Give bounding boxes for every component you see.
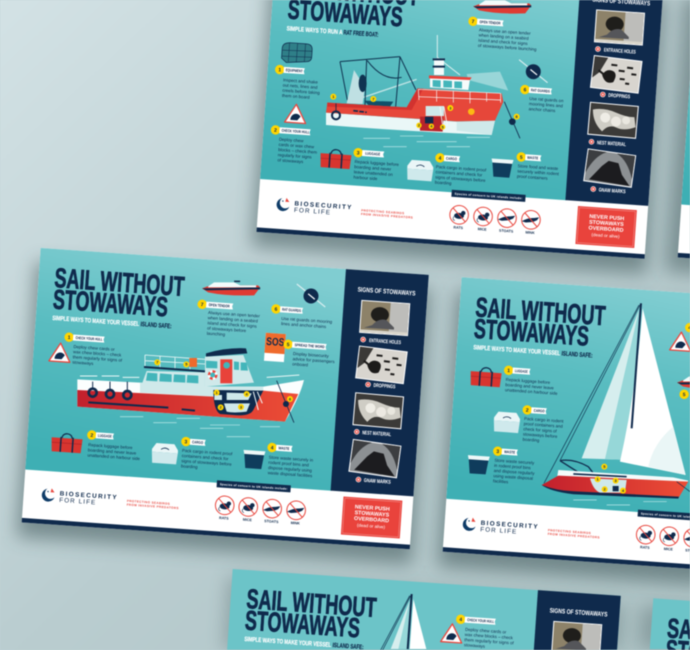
- step: check your hull: stowaways: [72, 360, 94, 366]
- step: luggage: boarding and never: [354, 164, 392, 172]
- logo and tagline: FROM INVASIVE PREDATORS: [127, 503, 179, 510]
- step: luggage: boarding and never leave: [88, 447, 137, 456]
- icon: cargo box: [406, 160, 434, 181]
- step: equipment: EQUIPMENT: [286, 68, 303, 73]
- icon: fishing boat: 7: [372, 96, 375, 101]
- step: waste: and dispose regularly: [494, 468, 535, 476]
- step: equipment: creels before taking: [282, 88, 321, 95]
- icon: cargo box: [151, 443, 178, 464]
- icon: motor vessel: 6: [289, 396, 292, 401]
- poster sheet with text: [256, 0, 664, 259]
- logo and tagline: FOR LIFE: [59, 497, 95, 506]
- step: open tender: of stowaways before launching: [478, 43, 537, 52]
- step: cargo: Pack cargo in rodent: [524, 416, 564, 424]
- step: luggage: LUGGAGE: [515, 369, 528, 374]
- step: open tender: when landing on a seabird: [478, 32, 529, 41]
- step: cargo: 4: [438, 156, 442, 162]
- step: check your hull: them regularly for signs of: [73, 354, 123, 363]
- step: luggage: [352, 148, 400, 183]
- step: equipment: Inspect and shake: [283, 77, 319, 85]
- step: check your hull marker: [685, 323, 690, 333]
- step: luggage: Repack luggage before: [354, 159, 400, 167]
- icon: warning triangle: [49, 342, 71, 362]
- step: waste: 3: [496, 449, 500, 455]
- step: check your hull: [63, 332, 125, 368]
- step: waste: dispose regularly using: [268, 465, 313, 473]
- icon: fishing boat: 4: [430, 124, 433, 129]
- icon: motor vessel: 2: [220, 405, 223, 410]
- logo and tagline: PROTECTING SEABIRDS: [548, 528, 591, 535]
- step: open tender marker: [679, 389, 689, 399]
- step: luggage: 2: [90, 433, 94, 439]
- step: cargo: containers and check for: [181, 453, 229, 461]
- step: cargo: [433, 153, 488, 188]
- species of concern: RATS: [453, 225, 464, 230]
- step: rat guards: Use rat guards on mooring: [281, 316, 333, 324]
- step: waste: 5: [520, 155, 523, 161]
- step: luggage: boarding and never leave: [505, 382, 555, 390]
- step: check your hull: stowaways: [464, 642, 485, 649]
- species of concern: MICE: [243, 518, 253, 522]
- step: check your hull: Deploy chew cards or: [465, 627, 507, 635]
- step: waste: Store waste securely in: [269, 455, 314, 463]
- step: open tender: 7: [471, 19, 475, 25]
- step: check your hull: 1: [67, 335, 71, 341]
- step: check your hull: wax chew blocks – check: [465, 632, 514, 640]
- poster shadow: [223, 577, 623, 650]
- species of concern: RATS: [219, 516, 229, 521]
- step: spread the word: 5: [286, 342, 290, 348]
- step: cargo: check for signs of: [523, 426, 558, 434]
- logo and tagline: FROM INVASIVE PREDATORS: [361, 212, 413, 220]
- step: waste: Store food and waste: [517, 163, 559, 171]
- step: open tender: island and check for signs: [478, 38, 528, 46]
- step: rat guards: [270, 304, 334, 330]
- step: check your hull: wax chew blocks – check: [73, 349, 122, 358]
- step: luggage: [502, 365, 560, 396]
- title: STOWAWAYS: [52, 284, 169, 322]
- callout: never push: OVERBOARD: [588, 225, 624, 234]
- icon: sailing yacht: 5: [603, 464, 606, 469]
- step: open tender: Always use an open tender: [479, 27, 531, 36]
- subtitle: RAT FREE BOAT:: [343, 29, 379, 39]
- step: check your hull: [454, 614, 516, 650]
- logo and tagline: BIOSECURITY: [59, 490, 118, 501]
- panel: signs of stowaways: NEST MATERIAL: [362, 430, 392, 438]
- icon: cargo box: [493, 411, 520, 433]
- icon: motor vessel: 5: [185, 362, 188, 367]
- icon: fishing boat: 1: [332, 94, 335, 99]
- step: spread the word: [282, 339, 336, 369]
- step: equipment: [273, 65, 322, 101]
- step: luggage: 1: [507, 368, 510, 374]
- step: waste: Store waste securely: [494, 458, 535, 465]
- poster shadow: [17, 262, 431, 564]
- icon: fishing boat: [326, 35, 520, 147]
- step: waste: in rodent proof bins: [494, 463, 531, 470]
- callout: never push: OVERBOARD: [354, 516, 389, 524]
- callout: never push: (dead or alive): [591, 232, 620, 239]
- title: SAIL WITHOUT: [246, 583, 378, 623]
- title: STOWAWAYS: [244, 605, 361, 643]
- step: luggage: 3: [357, 150, 360, 157]
- icon: fishing boat: 6: [516, 114, 519, 119]
- species of concern: STOATS: [264, 519, 279, 524]
- logo and tagline: FROM INVASIVE PREDATORS: [548, 532, 600, 539]
- callout: never push: [575, 206, 637, 248]
- poster sheet with text: [227, 569, 621, 650]
- logo and tagline: BIOSECURITY: [480, 520, 539, 531]
- icon: sos leaflet: SOS: [266, 336, 285, 349]
- step: cargo: [179, 437, 234, 472]
- step: luggage: unattended on harbour side: [87, 453, 141, 461]
- step: waste: WASTE: [527, 156, 539, 160]
- icon: waste bin: [467, 455, 490, 475]
- panel: signs of stowaways: ENTRANCE HOLES: [369, 338, 401, 346]
- step: luggage: [86, 430, 142, 461]
- step: rat guards: 6: [523, 87, 527, 93]
- step: rat guards: Use rat guards on: [529, 96, 564, 103]
- icon: warning triangle: [441, 623, 463, 643]
- step: cargo: proof containers and: [524, 421, 564, 429]
- step: waste: waste disposal facilities: [268, 470, 312, 478]
- step: spread the word: onboard: [292, 361, 309, 368]
- species of concern: [635, 510, 690, 554]
- step: luggage: unattended on harbour side: [505, 387, 558, 396]
- step: cargo: CARGO: [192, 440, 203, 445]
- panel: signs of stowaways: DROPPINGS: [608, 93, 631, 100]
- step: check your hull: blocks – check them: [278, 147, 318, 155]
- step: open tender: 7: [201, 302, 204, 308]
- step: check your hull: regularly for signs: [278, 152, 312, 160]
- poster: bottom right sheet: [637, 597, 690, 650]
- step: cargo: signs of stowaways before: [181, 458, 232, 467]
- step: check your hull: 4: [459, 617, 463, 623]
- species of concern: MINK: [525, 230, 535, 235]
- poster shadow: [438, 291, 690, 594]
- step: check your hull: cards or wax chew: [278, 142, 315, 149]
- step: luggage: harbour side: [353, 175, 378, 181]
- step: waste: securely within rodent: [517, 168, 560, 176]
- step: cargo: boarding: [181, 463, 198, 470]
- species of concern: [449, 190, 542, 235]
- step: luggage: leave unattended on: [354, 169, 393, 177]
- panel: signs of stowaways: NEST MATERIAL: [597, 140, 627, 148]
- subtitle: SIMPLE WAYS TO RUN A: [286, 25, 343, 36]
- poster: island-safe motor vessel (middle left): [17, 248, 431, 564]
- species of concern: STOATS: [499, 229, 514, 234]
- poster sheet with text: [22, 248, 429, 549]
- panel: signs of stowaways: SIGNS OF STOWAWAYS: [549, 608, 608, 619]
- step: cargo: stowaways before: [523, 432, 558, 439]
- step: check your hull: Deploy chew cards or: [73, 344, 115, 352]
- step: waste: [266, 442, 315, 478]
- logo and tagline: FOR LIFE: [294, 207, 330, 216]
- step: open tender: OPEN TENDOR: [479, 20, 501, 26]
- poster shadow: [251, 0, 666, 274]
- step: check your hull: [269, 125, 319, 165]
- subtitle: SIMPLE WAYS TO MAKE YOUR VESSEL: [52, 315, 139, 328]
- step: luggage: LUGGAGE: [98, 434, 112, 439]
- logo and tagline: [41, 487, 179, 512]
- step: waste: facilities: [493, 478, 508, 484]
- callout: never push: [341, 497, 402, 539]
- icon: warning triangle: [285, 104, 307, 123]
- icon: sails: [381, 594, 426, 650]
- step: spread the word: advice for passengers: [292, 356, 335, 364]
- step: open tender: [467, 16, 539, 52]
- logo and tagline: PROTECTING SEABIRDS: [127, 499, 170, 506]
- subtitle: SIMPLE WAYS TO MAKE YOUR VESSEL: [473, 344, 560, 357]
- step: waste: 4: [270, 445, 274, 451]
- icon: sailing yacht: 2: [604, 487, 607, 492]
- step: check your hull: 2: [274, 128, 277, 134]
- subtitle: ISLAND SAFE:: [561, 350, 593, 360]
- step: cargo: CARGO: [533, 409, 545, 413]
- icon: fishing boat: 3: [449, 105, 452, 110]
- icon: luggage: [320, 149, 352, 169]
- step: open tender: OPEN TENDOR: [209, 303, 230, 309]
- icon: sos leaflet: [264, 333, 286, 362]
- step: luggage: Repack luggage before: [506, 377, 551, 385]
- step: check your hull: CHECK YOUR HULL: [467, 618, 495, 624]
- icon: sailing yacht: [542, 303, 690, 505]
- poster: right edge sheet (top): [665, 0, 690, 276]
- step: open tender marker: 5: [682, 392, 686, 398]
- icon: waste bin: [490, 158, 514, 178]
- icon: motor vessel: 7: [156, 360, 159, 365]
- step: waste: [491, 446, 537, 486]
- icon: fishing boat: 2: [418, 123, 421, 128]
- step: check your hull: Deploy chew: [279, 137, 305, 143]
- title: SAIL WITHOUT: [475, 291, 607, 331]
- icon: waste bin: [242, 450, 265, 469]
- icon: sailing yacht: 1: [597, 477, 600, 482]
- panel: signs of stowaways: [344, 287, 416, 487]
- panel: signs of stowaways: [579, 0, 651, 196]
- species of concern: MICE: [664, 547, 674, 552]
- species of concern: RATS: [640, 545, 650, 550]
- step: waste: rodent proof bins and: [268, 460, 310, 468]
- step: open tender: when landing on a seabird: [208, 315, 259, 324]
- species of concern: Species of concern to UK islands include:: [454, 192, 523, 200]
- icon: motor vessel: [77, 348, 304, 437]
- step: waste: [515, 152, 561, 182]
- icon: rat guard: [518, 60, 549, 83]
- icon: motor vessel: 1: [216, 390, 219, 395]
- icon: tender boat: [677, 376, 690, 390]
- poster: fishing boat (top): [251, 0, 666, 274]
- step: cargo: boarding: [522, 437, 540, 443]
- title: STOWAWAYS: [473, 313, 590, 352]
- callout: never push: NEVER PUSH: [589, 214, 625, 222]
- icon: luggage: [51, 433, 83, 453]
- callout: never push: STOWAWAYS: [354, 510, 390, 519]
- step: cargo: Pack cargo in rodent proof: [182, 448, 233, 456]
- panel: signs of stowaways: SIGNS OF STOWAWAYS: [357, 287, 416, 298]
- step: rat guards: mooring lines and: [529, 101, 564, 108]
- poster sheet with text: [443, 277, 690, 579]
- step: waste: WASTE: [278, 446, 290, 451]
- species of concern: Species of concern to UK islands include:: [220, 482, 288, 491]
- icon: sailing yacht: 3: [615, 478, 618, 483]
- step: spread the word: SPREAD THE WORD: [294, 343, 325, 349]
- step: rat guards: RAT GUARDS: [531, 88, 550, 94]
- icon: sailing yacht: 4: [622, 488, 625, 493]
- icon: creel pot: [281, 42, 313, 64]
- panel: signs of stowaways: ENTRANCE HOLES: [604, 47, 636, 56]
- icon: fishing boat: 5: [442, 124, 445, 129]
- step: cargo: CARGO: [446, 157, 457, 161]
- logo and tagline: PROTECTING SEABIRDS: [361, 208, 404, 215]
- icon: motor vessel: 4: [246, 391, 249, 396]
- step: cargo: containers and check for: [435, 169, 483, 178]
- logo and tagline: BIOSECURITY: [294, 200, 352, 211]
- icon: tender boat: [202, 281, 260, 296]
- step: open tender: [195, 299, 261, 339]
- callout: never push: STOWAWAYS: [589, 220, 624, 228]
- poster: bottom centre sheet: [223, 569, 623, 650]
- icon: tender boat: [473, 0, 531, 14]
- step: open tender: Always use an open tender: [208, 310, 261, 319]
- step: open tender: of stowaways before: [207, 326, 247, 333]
- step: equipment: them on board: [282, 93, 310, 100]
- logo and tagline: [462, 516, 600, 541]
- step: cargo: Pack cargo in rodent proof: [436, 164, 487, 173]
- icon: rat guard: [295, 284, 327, 307]
- step: cargo: signs of stowaways before: [435, 174, 486, 183]
- step: rat guards: lines and anchor chains: [281, 321, 326, 329]
- step: check your hull: CHECK YOUR HULL: [75, 336, 103, 342]
- step: spread the word: Display biosecurity: [293, 351, 330, 359]
- step: luggage: LUGGAGE: [365, 151, 381, 157]
- icon: luggage: [470, 367, 502, 387]
- species of concern: [214, 480, 307, 526]
- species of concern: MINK: [291, 521, 300, 526]
- subtitle: ISLAND SAFE:: [140, 321, 172, 330]
- step: cargo: boarding: [435, 180, 452, 186]
- poster: sailing yacht (middle right): [438, 277, 690, 594]
- panel: signs of stowaways: GNAW MARKS: [598, 187, 626, 195]
- step: waste: using waste disposal: [493, 473, 533, 481]
- step: rat guards: RAT GUARDS: [282, 308, 301, 313]
- panel: signs of stowaways: [547, 608, 608, 650]
- step: luggage: Repack luggage before: [88, 442, 133, 450]
- panel: signs of stowaways: DROPPINGS: [373, 383, 396, 390]
- step: rat guards: [519, 85, 565, 114]
- step: open tender: island and check for signs: [207, 320, 257, 329]
- step: rat guards: 6: [274, 307, 278, 313]
- title: SAIL WITHOUT: [54, 262, 186, 302]
- species of concern: MICE: [478, 227, 487, 232]
- step: waste: proof containers: [517, 174, 548, 181]
- logo and tagline: FOR LIFE: [480, 526, 516, 536]
- step: cargo: [520, 405, 565, 444]
- step: waste: WASTE: [504, 450, 516, 455]
- step: equipment: 1: [278, 67, 282, 73]
- step: check your hull: them regularly for signs of: [464, 637, 515, 646]
- callout: never push: NEVER PUSH: [355, 504, 390, 513]
- callout: never push: (dead or alive): [357, 523, 386, 530]
- icon: warning triangle: [670, 331, 690, 351]
- panel: signs of stowaways: GNAW MARKS: [364, 478, 391, 486]
- step: open tender: launching: [207, 331, 226, 337]
- step: check your hull: CHECK YOUR HULL: [281, 129, 310, 135]
- step: cargo: 3: [184, 439, 188, 445]
- step: rat guards: anchor chains: [528, 106, 556, 113]
- icon: motor vessel: 3: [240, 404, 243, 409]
- step: check your hull: of stowaways: [277, 157, 303, 164]
- step: equipment: out nets, lines and: [283, 83, 318, 90]
- logo and tagline: [276, 197, 414, 222]
- step: cargo: 2: [526, 408, 529, 414]
